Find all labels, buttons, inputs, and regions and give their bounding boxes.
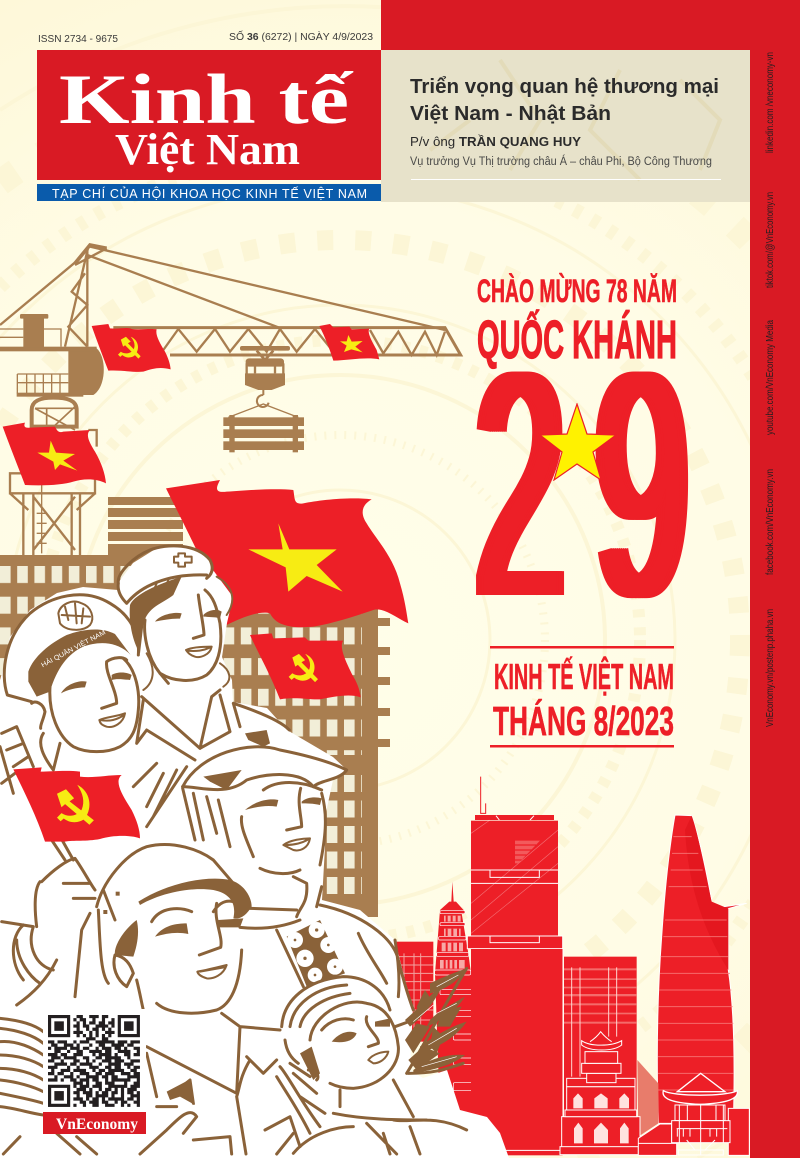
city skyline	[397, 777, 749, 1155]
arm holding flag	[52, 833, 73, 860]
QR code block	[43, 1009, 146, 1112]
sailor cap label: HẢI QUÂN VIỆT NAM	[39, 628, 107, 669]
social links on red strip: tiktok.com/@VnEconomy.vn	[765, 192, 776, 288]
issue label line 2: THÁNG 8/2023	[493, 698, 674, 744]
social links on red strip: linkedin.com /vneconomy-vn	[765, 52, 776, 153]
construction building	[0, 497, 390, 917]
main tower	[467, 777, 563, 1155]
bitexco tower	[657, 815, 747, 1123]
masthead logo: Kinh tế	[59, 61, 353, 139]
temple gate	[560, 1032, 640, 1155]
worker raised hand	[2, 858, 95, 1005]
flag: small national flag on jib	[319, 324, 379, 361]
header: ISSN: ISSN 2734 - 9675	[38, 34, 118, 45]
figure: worker	[2, 845, 280, 1154]
waving flag drawing at bottom left	[0, 1018, 97, 1154]
panel: featured story: Việt Nam - Nhật Bản	[410, 103, 611, 125]
rule above issue label	[490, 646, 674, 648]
masthead logo: Việt Nam	[115, 125, 300, 174]
VnEconomy label	[43, 1112, 146, 1134]
left office block	[397, 942, 433, 1042]
rice branch	[395, 968, 467, 1073]
figure: child	[265, 977, 467, 1154]
red top band and right strip	[381, 0, 800, 1158]
sailor face	[32, 658, 139, 770]
pilot wing badge	[203, 770, 242, 790]
child hair	[277, 977, 390, 1133]
crane hook and crate	[223, 346, 304, 452]
nurse cross badge	[174, 553, 192, 567]
big numeral: 9: 9	[596, 305, 688, 663]
QR modules	[48, 1017, 140, 1105]
flag: national flag on tower	[3, 423, 106, 485]
nurse uniform	[133, 673, 289, 827]
lower plinth	[638, 1108, 749, 1155]
child clothes	[265, 1113, 467, 1154]
worker collar and chest	[140, 1013, 280, 1154]
pavilion	[663, 1073, 737, 1155]
star between numerals	[541, 403, 615, 481]
pilot face	[241, 782, 325, 865]
figure: pilot	[52, 747, 347, 865]
pilot hair and straps	[183, 788, 230, 847]
tower crane	[0, 245, 461, 557]
worker face	[114, 901, 243, 1013]
nurse hair	[130, 577, 182, 653]
heading: celebration: CHÀO MỪNG 78 NĂM	[477, 273, 677, 309]
panel: featured story	[381, 50, 750, 202]
pale shadow wedge	[637, 1060, 658, 1137]
crane cabin and machinery	[0, 314, 104, 430]
social links on red strip: VnEconomy.vn/postenp.phaha.vn	[765, 609, 776, 727]
sailor cap band	[28, 629, 131, 697]
nurse shoulder badge	[245, 730, 270, 747]
crane mast and stays	[0, 245, 445, 347]
masthead subtitle bar: TẠP CHÍ CỦA HỘI KHOA HỌC KINH TẾ VIỆT NAM	[52, 186, 367, 201]
flag: party flag on crane	[92, 324, 171, 372]
big numeral: 2: 2	[476, 305, 564, 663]
panel: featured story: P/v ông TRẦN QUANG HUY	[410, 134, 582, 149]
middle office block	[564, 957, 637, 1117]
social links on red strip	[765, 52, 776, 727]
scarf flowers	[287, 920, 345, 987]
flag: large national flag	[166, 480, 408, 627]
worker helmet	[97, 845, 252, 983]
sailor cap emblem	[58, 602, 92, 630]
rifle strap and stock	[0, 727, 33, 793]
VnEconomy label: VnEconomy	[56, 1116, 138, 1133]
pagoda	[435, 882, 480, 1117]
figures: white silhouette	[0, 545, 509, 1158]
crane jib truss	[113, 328, 461, 355]
social links on red strip: youtube.com/VnEconomy Media	[765, 320, 776, 435]
nurse face	[145, 590, 222, 680]
child face	[308, 1002, 413, 1117]
flag: party flag held by sailor	[13, 767, 140, 842]
figure: pilot collar and scarf	[240, 868, 413, 1010]
panel: featured story: Triển vọng quan hệ thương mại	[410, 76, 719, 98]
social links on red strip: facebook.com/VnEconomy.vn	[765, 469, 776, 575]
rule below issue label	[490, 745, 674, 748]
crane lower lattice	[10, 430, 97, 557]
masthead logo	[37, 50, 381, 180]
flag: party flag on building	[250, 633, 361, 699]
header: issue and date: SỐ 36 (6272) | NGÀY 4/9/2023	[229, 29, 373, 43]
figure: nurse	[118, 546, 289, 827]
figure: sailor	[0, 595, 139, 793]
panel: featured story: Vụ trưởng Vụ Thị trường châu Á – châu Phi, Bộ Công Thương	[410, 155, 712, 168]
